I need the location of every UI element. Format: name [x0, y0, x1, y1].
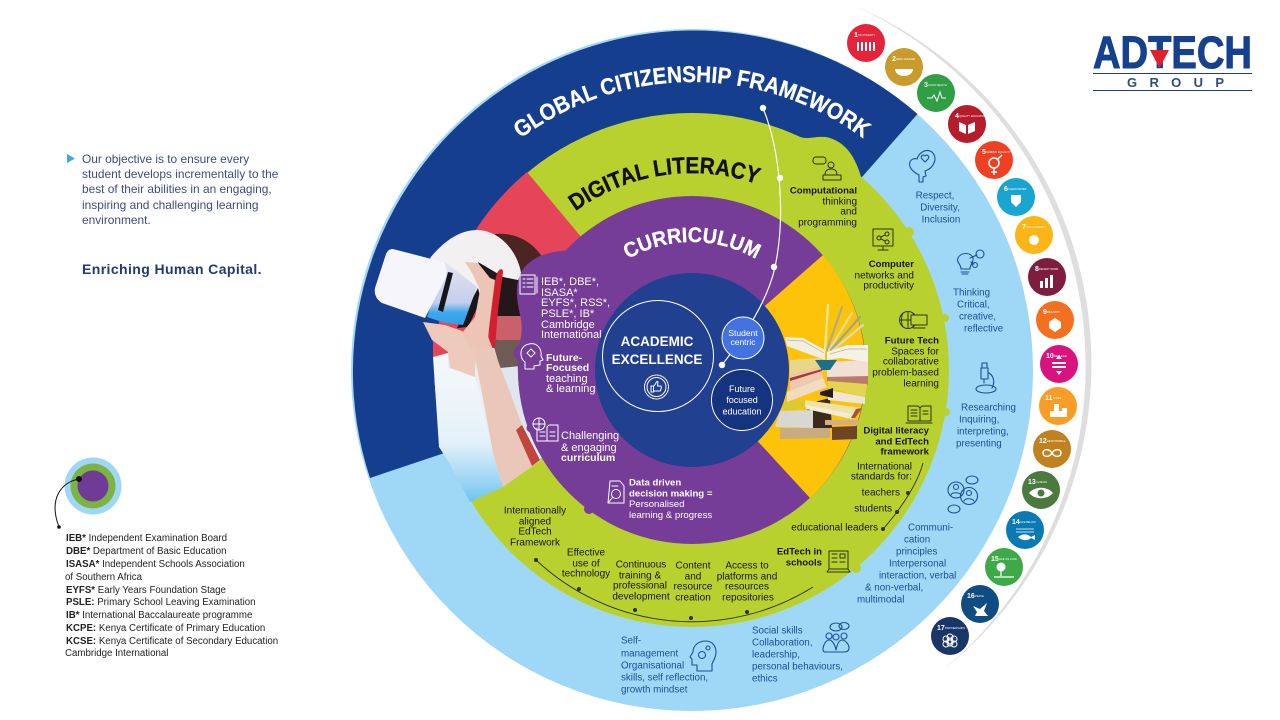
edtech in schools text: EdTech in [777, 546, 822, 558]
shirt [433, 353, 503, 502]
hair at back of head [495, 234, 545, 290]
SDG 12 responsible consumption: 12 [1039, 438, 1047, 445]
icon: report with magnifier [608, 481, 624, 503]
social skills text: leadership, [752, 650, 800, 660]
icon: head with gears [690, 641, 716, 671]
neck and chin [423, 322, 476, 377]
legend: abbreviations: Kenya Certificate of Primary Education [96, 623, 265, 634]
legend: abbreviations: Department of Basic Education [90, 546, 226, 557]
panel: academic excellence core [595, 105, 789, 467]
content creation text: creation [675, 592, 711, 604]
framework timeline with dots [534, 558, 813, 622]
thinking text: Critical, [957, 300, 990, 310]
SDG 2 zero hunger: 2 [892, 56, 896, 63]
effective use text: Effective [567, 548, 606, 558]
exam board list: PSLE*, IB* [541, 308, 595, 320]
SDG 9 industry innovation: INDUSTRY [1047, 310, 1060, 314]
photo: student wearing VR headset [375, 230, 545, 502]
respect text: Respect, [916, 190, 954, 202]
legend: abbreviations: of Southern Africa [65, 572, 143, 583]
SDG 7 clean energy: 7 [1022, 224, 1026, 231]
icon: open framework book [906, 406, 932, 423]
icon: book and globe [533, 418, 558, 441]
yellow wedge [692, 255, 866, 498]
researching text: Researching [961, 402, 1016, 414]
heading: digital literacy: DIGITAL LITERACY [568, 157, 762, 210]
respect text: Inclusion [922, 214, 960, 226]
thinking text: reflective [964, 324, 1004, 334]
SDG 3 good health [917, 74, 955, 112]
legend: abbreviations: KCSE: [66, 636, 96, 647]
SDG 8 decent work: DECENT WORK [1039, 267, 1059, 271]
navy sector [353, 30, 918, 478]
mini diagram: curriculum locator [55, 458, 122, 529]
legend: abbreviations: Kenya Certificate of Secondary Education [96, 636, 278, 647]
panel: global citizenship ring [351, 29, 1033, 711]
computer networks text: productivity [863, 280, 914, 292]
SDG 16 peace and justice: 16 [967, 593, 975, 600]
objective paragraph: student develops incrementally to the [82, 167, 279, 181]
fanned pages [825, 305, 863, 350]
international standards text: standards for: [851, 472, 912, 482]
data driven text: Personalised [629, 499, 684, 510]
curriculum item: future-focused teaching [521, 344, 596, 395]
continuous training text: Continuous [616, 560, 666, 570]
SDG 3 good health: 3 [924, 82, 928, 89]
exam board list: International [541, 329, 602, 341]
data driven text: Data driven [629, 478, 681, 488]
digital literacy framework text: Digital literacy [863, 426, 930, 436]
social skills text: personal behaviours, [752, 662, 843, 672]
exam board list: ISASA* [541, 287, 578, 299]
SDG 15 life on land: 15 [991, 556, 999, 563]
access to platforms text: platforms and [717, 572, 777, 582]
SDG 17 partnerships: 17 [937, 625, 945, 632]
digital literacy framework text: framework [880, 446, 930, 458]
legend: abbreviations: KCPE: [66, 623, 96, 634]
social skills text: Collaboration, [752, 638, 812, 648]
content creation text: and [685, 572, 701, 582]
headset visor [427, 262, 477, 325]
continuous training text: training & [619, 570, 661, 582]
researching block [956, 363, 1016, 450]
self-management text: skills, self reflection, [621, 672, 708, 684]
access to platforms text: repositories [722, 592, 774, 604]
SDG 8 decent work [1028, 258, 1066, 296]
access to platforms text: resources [725, 582, 769, 592]
self-management text: Self- [621, 636, 641, 646]
content creation text: Content [675, 560, 711, 572]
hand [462, 262, 495, 349]
communication text: interaction, verbal [879, 570, 956, 582]
effective use text: technology [562, 568, 610, 580]
right stack [827, 360, 868, 377]
future-focused text: Focused [546, 362, 589, 374]
SDG 11 sustainable cities: 11 [1045, 395, 1053, 402]
continuous training text: development [612, 592, 670, 602]
future focused education circle: focused [726, 395, 758, 405]
future-focused text: & learning [546, 383, 596, 395]
SDG 1 no poverty [847, 24, 885, 62]
computer networks text: networks and [855, 270, 914, 282]
edtech in schools text: schools [786, 558, 822, 568]
social skills text: ethics [752, 674, 778, 684]
social skills text: Social skills [752, 626, 803, 636]
SDG 5 gender equality: 5 [982, 149, 986, 156]
SDG 13 climate action: 13 [1028, 479, 1036, 486]
challenging text: Challenging [561, 430, 619, 442]
legend: abbreviations: IEB* [66, 533, 86, 544]
icon: edtech laptop [827, 551, 850, 572]
objective paragraph: environment. [82, 213, 151, 227]
computational thinking text: Computational [790, 186, 857, 196]
future focused education circle [712, 370, 772, 430]
SDG 1 no poverty: NO POVERTY [858, 33, 875, 37]
SDG 1 no poverty: 1 [854, 32, 858, 39]
logo rules [1093, 74, 1252, 90]
thinking text: creative, [959, 312, 996, 322]
heading: global citizenship framework: GLOBAL CITIZENSHIP FRAMEWORK [514, 66, 872, 139]
green disc [435, 113, 949, 627]
icon: computer network [873, 229, 893, 250]
SDG 14 life below water: 14 [1012, 519, 1020, 526]
exam board list: EYFS*, RSS*, [541, 297, 610, 309]
content creation text: resource [674, 582, 713, 592]
SDG 3 good health: GOOD HEALTH [928, 83, 947, 87]
international standards text: International [857, 462, 912, 472]
future tech spaces text: Future Tech [885, 336, 939, 346]
future focused education circle: Future [729, 384, 755, 394]
left stack [790, 358, 820, 375]
exam board list: IEB*, DBE*, [541, 276, 599, 288]
icon: future tech globe [900, 312, 927, 328]
SDG 7 clean energy [1015, 216, 1053, 254]
legend: abbreviations: DBE* [66, 546, 90, 557]
SDG 13 climate action: CLIMATE [1036, 480, 1047, 484]
SDG 7 clean energy: CLEAN ENERGY [1026, 225, 1047, 229]
objective paragraph: Our objective is to ensure every [82, 152, 249, 166]
SDG 4 quality education: 4 [955, 113, 959, 120]
curriculum item: data driven decisions [608, 478, 713, 521]
internationally aligned text: EdTech [518, 526, 552, 538]
future tech spaces text: problem-based [872, 368, 939, 378]
legend: abbreviations: ISASA* [66, 559, 100, 570]
small edge bumps [851, 227, 950, 573]
SDG 2 zero hunger [885, 48, 923, 86]
curriculum item: exam boards [520, 275, 610, 341]
SDG 17 partnerships [931, 617, 969, 655]
logo: Adtech Group [1093, 27, 1252, 90]
SDG 15 life on land [985, 548, 1023, 586]
future tech spaces text: Spaces for [891, 346, 940, 358]
bullet arrow [67, 154, 75, 163]
SDG 6 clean water: CLEAN WATER [1008, 187, 1027, 191]
SDG 5 gender equality: GENDER EQUALITY [986, 150, 1011, 154]
SDG 17 partnerships: PARTNERSHIPS [945, 626, 965, 630]
future tech spaces text: learning [903, 378, 939, 390]
green ring labels: right side [790, 157, 940, 534]
internationally aligned text: aligned [519, 516, 551, 528]
self-management text: growth mindset [621, 684, 688, 696]
SDG 9 industry innovation [1036, 301, 1074, 339]
white cap [430, 230, 522, 300]
future focused education circle: education [722, 406, 762, 416]
SDG 15 life on land: LIFE ON LAND [999, 557, 1017, 561]
blue ribbon [815, 360, 837, 370]
SDG badges arc [847, 24, 1078, 655]
lower left bumps [526, 424, 594, 514]
legend: abbreviations: EYFS* [66, 585, 95, 596]
objective paragraph: best of their abilities in an engaging, [82, 182, 272, 196]
challenging text: curriculum [561, 452, 615, 464]
SDG 14 life below water: LIFE BELOW [1020, 520, 1036, 524]
future tech spaces text: collaborative [883, 356, 939, 368]
arm [473, 348, 540, 487]
academic excellence ring [602, 300, 714, 412]
SDG 4 quality education [948, 105, 986, 143]
student centric circle: Student [728, 328, 758, 338]
light blue ring labels [621, 150, 1016, 696]
large bump behind computational thinking [796, 135, 862, 225]
legend: abbreviations: IB* [66, 610, 80, 621]
logo group text: GROUP [1127, 75, 1224, 90]
communication text: multimodal [857, 594, 904, 606]
SDG 6 clean water: 6 [1004, 186, 1008, 193]
legend: abbreviations: International Baccalaureate programme [79, 610, 252, 621]
black rear of headset [457, 288, 481, 328]
icon: microscope [976, 363, 996, 393]
red sector [435, 172, 692, 370]
international standards text: teachers [862, 488, 900, 498]
connector line with dots [719, 105, 783, 368]
dark hair beside the face [478, 262, 523, 322]
communication text: principles [896, 546, 937, 558]
SDG 13 climate action [1022, 471, 1060, 509]
SDG 10 reduced inequalities [1040, 345, 1078, 383]
legend: abbreviations: PSLE: [66, 597, 95, 608]
computational thinking text: programming [798, 218, 857, 228]
SDG 2 zero hunger: ZERO HUNGER [896, 57, 915, 61]
academic excellence title: ACADEMIC [621, 334, 694, 349]
internationally aligned text: Framework [510, 538, 561, 548]
researching text: interpreting, [957, 426, 1009, 438]
SDG 8 decent work: 8 [1035, 266, 1039, 273]
SDG 6 clean water [997, 178, 1035, 216]
challenging text: & engaging [561, 442, 617, 454]
academic excellence title: EXCELLENCE [612, 352, 702, 367]
face and lips [492, 316, 522, 342]
upper left bulge [513, 250, 640, 418]
effective use text: use of [572, 558, 600, 570]
SDG 16 peace and justice [961, 585, 999, 623]
SDG 9 industry innovation: 9 [1043, 309, 1047, 316]
icon: head with target [521, 344, 543, 369]
communication text: & non-verbal, [865, 582, 923, 594]
SDG 12 responsible consumption [1033, 430, 1071, 468]
SDG 10 reduced inequalities: REDUCED [1054, 354, 1067, 358]
legend: abbreviations: Independent Examination Board [86, 533, 227, 544]
small red background patch [433, 340, 452, 358]
future-focused text: teaching [546, 373, 588, 385]
red arm reflection [516, 425, 540, 466]
navy inner disc [595, 273, 789, 467]
green ring labels: bottom [504, 506, 850, 622]
future-focused text: Future- [546, 352, 583, 364]
communication text: Communi- [908, 522, 953, 534]
dark gap between stacks [806, 398, 832, 428]
curriculum item: challenging curriculum [533, 418, 619, 464]
data driven text: decision making = [629, 488, 713, 500]
data driven text: learning & progress [629, 510, 712, 521]
icon: bulb with network [958, 250, 984, 274]
photo backing wedge [434, 352, 692, 500]
computer networks text: Computer [869, 259, 914, 270]
researching text: Inquiring, [959, 414, 999, 426]
headset slot [438, 272, 453, 312]
communication text: Interpersonal [889, 558, 946, 570]
self-management text: management [621, 648, 678, 660]
legend: abbreviations: Early Years Foundation Stage [95, 585, 226, 596]
legend: abbreviations: Cambridge International [65, 648, 168, 659]
outer white crescent with grey edge [853, 5, 1091, 670]
self-management text: Organisational [621, 660, 684, 672]
student centric circle [722, 317, 764, 359]
communication text: cation [904, 534, 930, 546]
logo wordmark: ADTECH [1093, 27, 1252, 78]
digital literacy framework text: and EdTech [875, 436, 929, 448]
exam board list: Cambridge [541, 319, 595, 331]
researching text: presenting [956, 438, 1002, 450]
purple disc [518, 196, 866, 544]
internationally aligned text: Internationally [504, 506, 566, 516]
student centric circle: centric [730, 337, 756, 347]
objective paragraph: inspiring and challenging learning [82, 198, 259, 212]
icon: computational thinking [813, 157, 841, 180]
thinking block [953, 250, 1004, 334]
SDG 14 life below water [1006, 511, 1044, 549]
light blue ring [351, 29, 1033, 711]
access to platforms text: Access to [725, 560, 769, 572]
books illustration [775, 305, 868, 440]
objective text block [67, 152, 279, 227]
tagline: Enriching Human Capital. [82, 261, 262, 277]
SDG 11 sustainable cities [1039, 387, 1077, 425]
icon: thumbs-up badge [644, 375, 668, 399]
thinking text: Thinking [953, 288, 990, 298]
computational thinking text: thinking [823, 196, 857, 208]
international standards text: students [854, 504, 892, 514]
respect block [910, 150, 960, 226]
lower hair and neck shade [492, 340, 520, 368]
SDG 5 gender equality [975, 141, 1013, 179]
SDG 4 quality education: QUALITY EDUCATION [959, 114, 986, 118]
SDG 11 sustainable cities: CITIES [1053, 396, 1062, 400]
logo red triangle [1150, 50, 1169, 68]
heading: curriculum: CURRICULUM [624, 227, 762, 258]
SDG 12 responsible consumption: RESPONSIBLE [1047, 439, 1066, 443]
icon: people with speech bubbles [948, 476, 978, 513]
respect text: Diversity, [920, 202, 960, 214]
red stripe beside hand [488, 269, 503, 348]
middle book [805, 400, 862, 418]
legend: abbreviations: Independent Schools Association [99, 559, 245, 570]
icon: group of people [823, 622, 849, 652]
continuous training text: professional [613, 580, 667, 592]
self-management block [621, 636, 716, 696]
panel: curriculum ring [513, 196, 864, 544]
international standards text: educational leaders [791, 522, 878, 534]
panel: digital literacy ring [434, 113, 950, 627]
SDG 16 peace and justice: PEACE [975, 594, 984, 598]
icon: checklist document [520, 275, 537, 294]
social skills block [752, 622, 849, 684]
headset front [375, 249, 447, 318]
legend: abbreviations: Primary School Leaving Examination [95, 597, 256, 608]
icon: head with heart [910, 150, 935, 182]
communication principles block [857, 476, 978, 606]
computational thinking text: and [840, 206, 857, 218]
SDG 10 reduced inequalities: 10 [1046, 353, 1054, 360]
standards connector with dots [881, 463, 923, 531]
shirt back patch [490, 345, 530, 440]
bottom books [825, 420, 860, 425]
open book pages [785, 337, 825, 360]
